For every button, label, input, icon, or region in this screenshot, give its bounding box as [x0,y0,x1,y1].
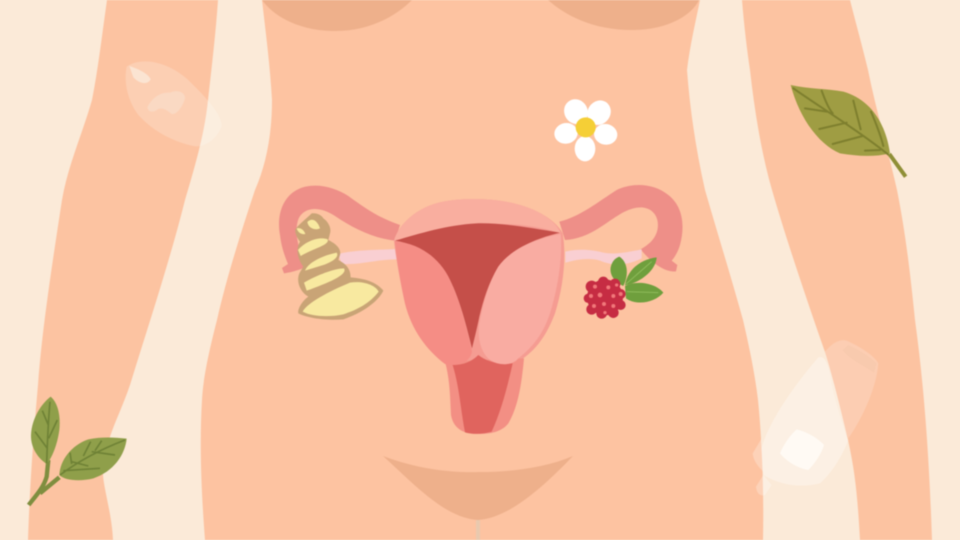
leaf stalk [889,154,906,177]
uterus top cap [394,199,561,241]
left uterine lobe [395,241,472,365]
raspberry with leaves [584,257,663,319]
bandage back strip [825,340,878,438]
ginger root [295,213,383,320]
cervix [445,355,524,434]
top right leaf [791,85,906,177]
sprig lower leaf veins [60,440,125,475]
ginger flesh band one [298,238,328,256]
raspberry leaf left [610,257,627,286]
raspberry berry [584,277,626,319]
ginger flesh band two [305,253,337,271]
raspberry leaf upper [625,257,657,285]
right arm [742,0,932,540]
reproductive organs [279,185,683,434]
ginger flesh top left [297,228,305,234]
right uterine lobe [479,234,561,364]
raspberry leaf lower [625,283,663,303]
right ovarian ligament [565,249,642,264]
patch film [126,61,222,146]
ginger flesh band three [304,268,345,291]
vaginal canal [453,355,513,434]
ginger flesh large slice [303,282,379,316]
bandage front strip [762,357,848,486]
bottom left sprig [29,397,127,505]
left arm patch [126,61,222,146]
leaf veins [793,88,890,156]
flower petals [553,95,619,161]
right fallopian tube [559,185,683,271]
leaf blade [791,85,890,156]
sprig upper leaf veins [35,402,57,463]
flower centre [576,117,596,137]
patch highlight small [129,66,151,83]
left ovarian ligament [338,249,397,264]
cervix outer wall [445,358,524,434]
leaf veins [626,262,658,293]
bandage back tab [843,345,877,373]
uterus body [394,199,564,365]
uterine cavity [395,223,560,348]
pubic triangle [383,456,573,520]
torso [201,0,763,540]
raspberry seeds [589,283,623,314]
flower [553,95,619,161]
sprig upper leaf [31,397,60,464]
ginger skin [295,213,383,320]
sprig lower leaf [59,437,127,480]
bandage gauze pad [780,429,824,470]
chest: right breast [548,0,699,30]
midline crease [476,520,480,540]
ginger flesh top right [307,220,320,229]
left fallopian tube [279,186,400,273]
chest: left breast [262,0,412,31]
patch highlight heart [147,91,185,114]
left arm [28,0,218,540]
sprig stem [29,460,59,505]
bandage lower left tabs [753,438,772,495]
right arm bandage [753,340,878,495]
